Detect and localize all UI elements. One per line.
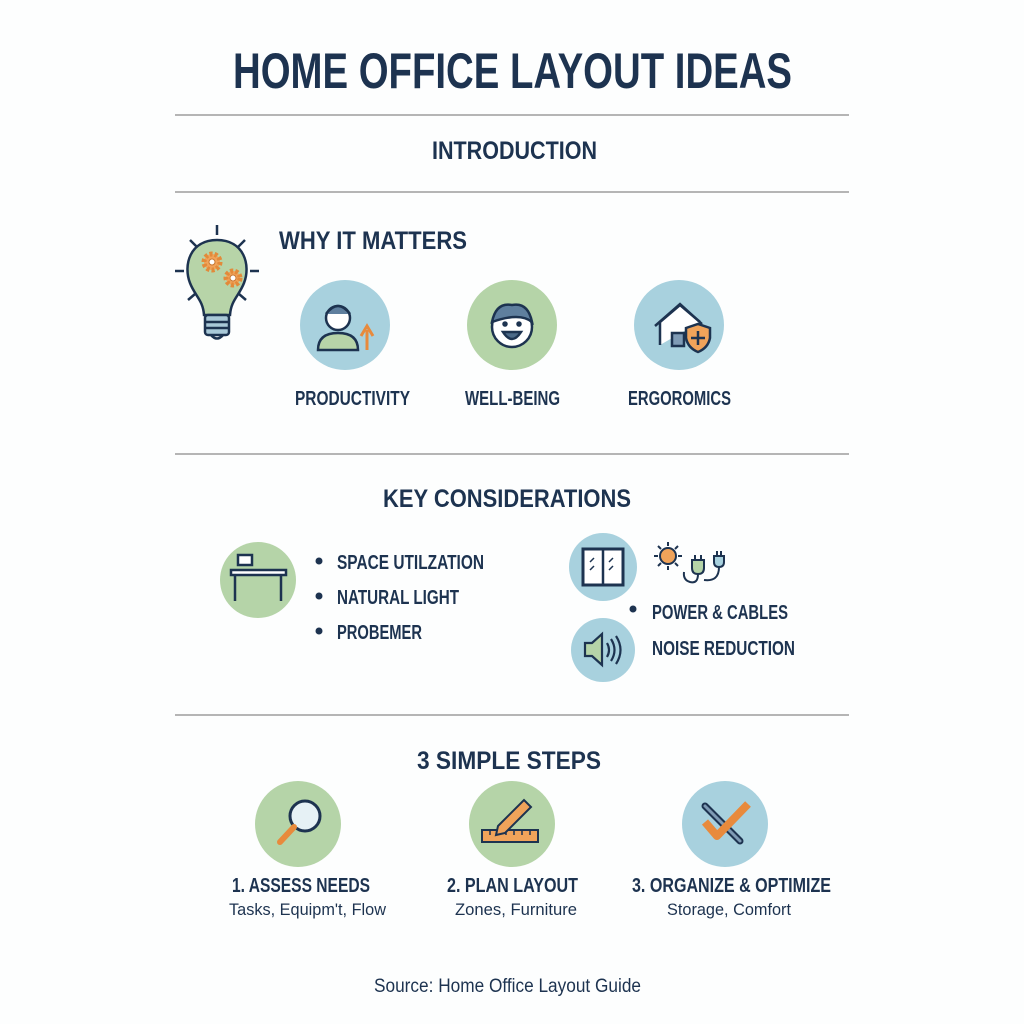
step 2: plan layout: Zones, Furniture (455, 900, 577, 919)
icon: speaker (571, 618, 635, 682)
step 3: organize & optimize: 3. ORGANIZE & OPTIMIZE (632, 875, 831, 897)
item: productivity (295, 280, 411, 410)
panel: why it matters (175, 225, 731, 410)
step 1: assess needs (229, 781, 387, 919)
item: ergonomics: ERGOROMICS (628, 388, 731, 410)
heading: introduction: INTRODUCTION (432, 137, 597, 165)
title: HOME OFFICE LAYOUT IDEAS (233, 43, 792, 99)
source: Source: Home Office Layout Guide (374, 976, 641, 997)
icon: desk (220, 542, 296, 618)
icon: sun and plug (654, 542, 724, 582)
icon: lightbulb with gears (175, 225, 259, 338)
list: right considerations (630, 602, 795, 660)
step 2: plan layout: 2. PLAN LAYOUT (447, 875, 578, 897)
panel: 3 simple steps (229, 747, 831, 919)
icon: window (569, 533, 637, 601)
item: well-being (465, 280, 560, 410)
heading: 3 simple steps: 3 SIMPLE STEPS (417, 747, 601, 775)
step 2: plan layout (447, 781, 578, 919)
item: ergonomics (628, 280, 731, 410)
step 3: organize & optimize: Storage, Comfort (667, 900, 791, 919)
list: left considerations (316, 552, 484, 644)
step 1: assess needs: 1. ASSESS NEEDS (232, 875, 370, 897)
panel: key considerations (220, 485, 795, 682)
item: productivity: PRODUCTIVITY (295, 388, 411, 410)
step 3: organize & optimize (632, 781, 831, 919)
list: left considerations: SPACE UTILZATION (337, 552, 484, 574)
list: right considerations: POWER & CABLES (652, 602, 788, 624)
step 1: assess needs: Tasks, Equipm't, Flow (229, 900, 387, 919)
heading: key considerations: KEY CONSIDERATIONS (383, 485, 631, 513)
list: left considerations: NATURAL LIGHT (337, 587, 459, 609)
list: left considerations: PROBEMER (337, 622, 422, 644)
heading: why it matters: WHY IT MATTERS (279, 227, 467, 255)
item: well-being: WELL-BEING (465, 388, 560, 410)
list: right considerations: NOISE REDUCTION (652, 638, 795, 660)
